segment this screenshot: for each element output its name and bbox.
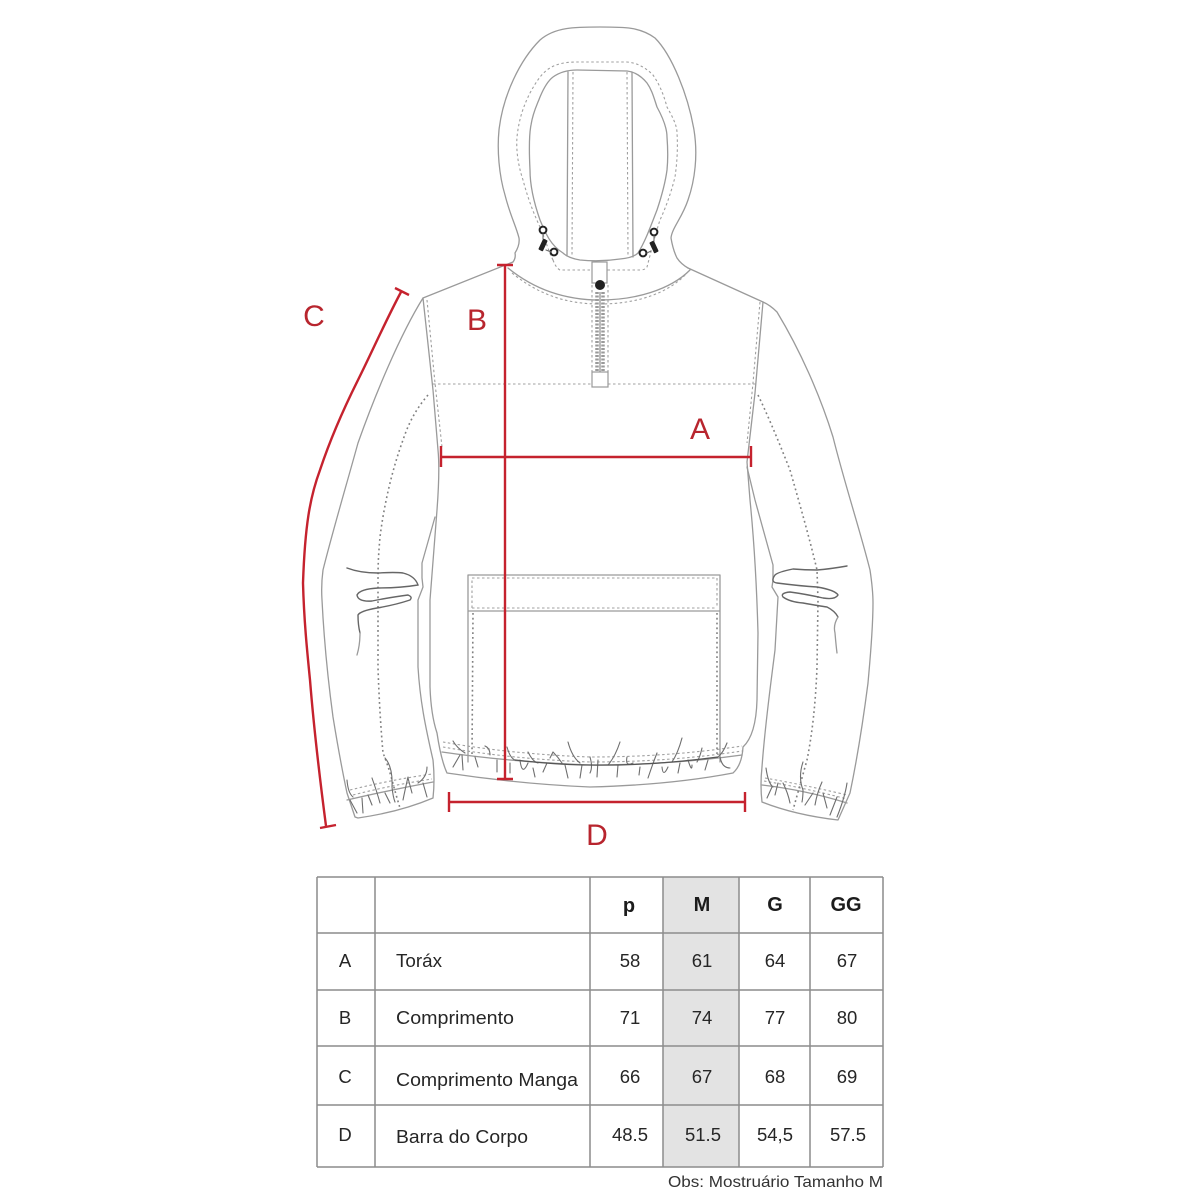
header row: G [767, 894, 783, 916]
row D: 48.5 [612, 1124, 648, 1145]
row A: 67 [837, 950, 857, 971]
hem gathers [453, 738, 730, 778]
row C: C [338, 1066, 352, 1087]
measure C: sleeve: C [303, 300, 325, 333]
drawcord toggles [538, 227, 659, 256]
size table [317, 877, 883, 1167]
row C: 66 [620, 1066, 640, 1087]
right cuff gathers [766, 762, 847, 817]
row B: Comprimento [396, 1007, 514, 1028]
row B: 80 [837, 1007, 857, 1028]
row D: 51.5 [685, 1124, 721, 1145]
measure B: length [467, 265, 513, 779]
left cuff gathers [347, 758, 427, 813]
measure C: sleeve [303, 288, 409, 828]
jacket body outline [423, 262, 763, 787]
left elbow wrinkles [347, 568, 418, 655]
half zip [592, 262, 608, 387]
row D: 57.5 [830, 1124, 866, 1145]
measure D: hem: D [586, 819, 608, 852]
row D [338, 1124, 866, 1147]
row A [339, 950, 857, 971]
measure B: length: B [467, 304, 487, 337]
row A: A [339, 950, 352, 971]
row B: 74 [692, 1007, 712, 1028]
measure A: chest: A [690, 413, 710, 446]
row C: Comprimento Manga [396, 1069, 579, 1090]
row B [339, 1007, 857, 1028]
header row: GG [830, 894, 862, 916]
row D: 54,5 [757, 1124, 793, 1145]
row D: D [338, 1124, 352, 1145]
row C [338, 1066, 857, 1090]
jacket technical drawing [322, 27, 873, 820]
row D: Barra do Corpo [396, 1126, 528, 1147]
measure A: chest [441, 413, 751, 467]
row C: 67 [692, 1066, 712, 1087]
row A: 64 [765, 950, 785, 971]
row A: 61 [692, 950, 712, 971]
hood [498, 27, 696, 270]
row B: 71 [620, 1007, 640, 1028]
row C: 68 [765, 1066, 785, 1087]
table grid [317, 877, 883, 1167]
row B: B [339, 1007, 351, 1028]
row A: 58 [620, 950, 640, 971]
row C: 69 [837, 1066, 857, 1087]
measure D: hem [449, 792, 745, 852]
footnote: Obs: Mostruário Tamanho M [668, 1174, 883, 1191]
header row [623, 894, 862, 917]
right elbow wrinkles [773, 566, 847, 653]
left sleeve [322, 298, 435, 818]
row A: Toráx [396, 950, 443, 971]
row B: 77 [765, 1007, 785, 1028]
highlighted M column [663, 877, 739, 1167]
kangaroo pocket [468, 575, 720, 762]
right sleeve [747, 302, 873, 820]
header row: p [623, 895, 635, 917]
header row: M [694, 894, 710, 916]
